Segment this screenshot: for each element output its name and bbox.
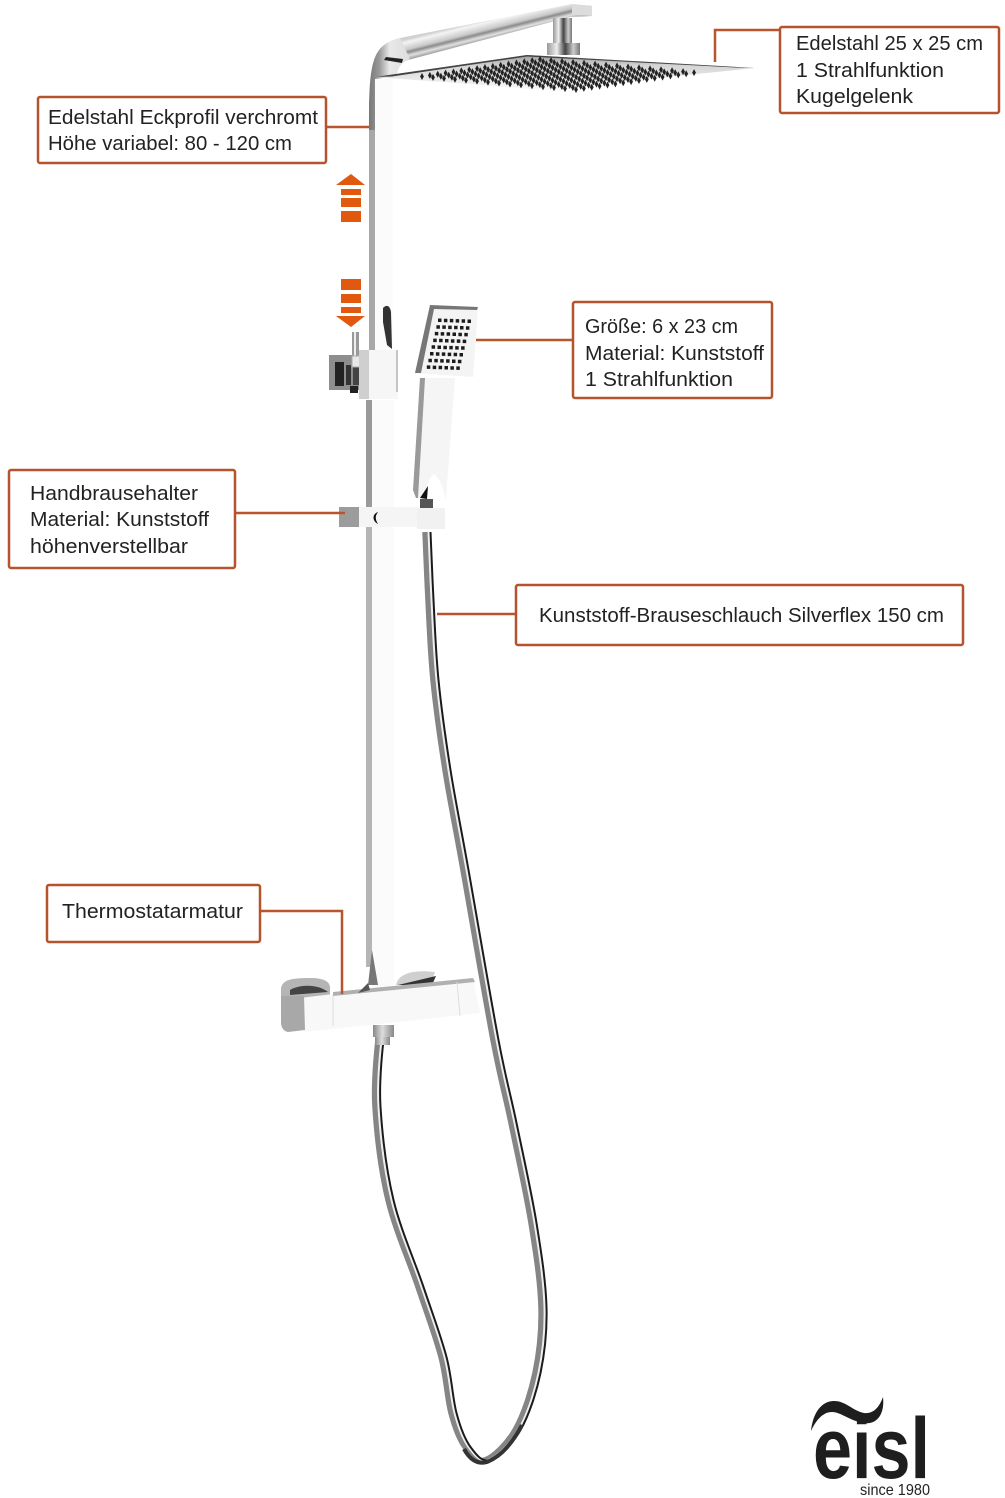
callout: holder [9,470,345,568]
callout: profile [38,97,369,163]
logo wave [811,1397,883,1431]
hand shower [413,305,478,499]
hose [375,532,547,1463]
callout: thermostat [47,885,342,994]
shower system [281,4,755,1463]
callout: hand shower: Material: Kunststoff [585,343,764,365]
wall bracket [329,332,366,393]
callout: hand shower [476,302,772,398]
callout: rain shower [715,27,999,113]
rain shower head [375,55,755,93]
overhead arm [369,4,592,130]
callout: rain shower: Edelstahl 25 x 25 cm [796,33,983,55]
callout: rain shower: 1 Strahlfunktion [796,60,944,82]
ball joint [547,18,580,55]
arrow down [336,279,365,327]
callout: hand shower: 1 Strahlfunktion [585,369,733,391]
callout: hand shower: Größe: 6 x 23 cm [585,316,738,338]
nozzles [420,56,696,93]
slider block [359,306,398,399]
callout: hose: Kunststoff-Brauseschlauch Silverflex 150 cm [539,605,944,627]
callout: holder: Material: Kunststoff [30,509,209,531]
column [366,72,395,990]
callout: rain shower: Kugelgelenk [796,86,914,108]
spray holes [427,318,471,370]
callout: profile: Höhe variabel: 80 - 120 cm [48,133,292,155]
callout: profile: Edelstahl Eckprofil verchromt [48,107,318,129]
callout: hose [437,585,963,645]
callout: thermostat: Thermostatarmatur [62,901,243,923]
callout: holder: Handbrausehalter [30,483,198,505]
callout: holder: höhenverstellbar [30,536,188,558]
logo: eisl: eisl [813,1401,930,1497]
arrow up [336,174,365,222]
thermostat valve [281,971,480,1045]
hand shower holder [339,499,445,529]
